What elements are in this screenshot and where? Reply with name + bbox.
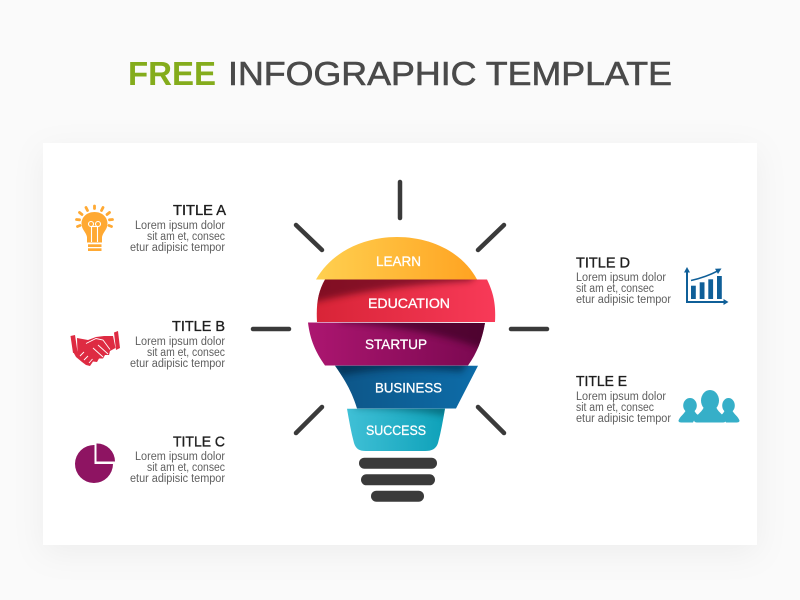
band: startup: STARTUP	[365, 337, 427, 352]
body text: etur adipisic tempor	[130, 358, 225, 370]
icon: handshake	[70, 331, 120, 366]
title: FREE	[128, 55, 216, 92]
band: education	[316, 280, 496, 322]
bulb base	[359, 458, 437, 502]
icon: group of people	[678, 390, 740, 422]
band: education: EDUCATION	[368, 296, 450, 311]
body text: Lorem ipsum dolor	[135, 451, 225, 463]
heading: TITLE B	[172, 319, 225, 335]
body text: Lorem ipsum dolor	[135, 336, 225, 348]
chart: light bulb of stacked bands	[308, 237, 495, 502]
body text	[130, 451, 225, 485]
heading: TITLE D	[576, 256, 630, 272]
icon: bar chart	[684, 267, 728, 305]
band: business	[335, 366, 478, 408]
body text	[130, 220, 225, 254]
body text	[576, 272, 671, 306]
body text: Lorem ipsum dolor	[576, 391, 666, 403]
body text	[130, 336, 225, 370]
body text: sit am et, consec	[147, 462, 225, 474]
icon: pie chart	[75, 443, 115, 483]
block: title D	[576, 256, 728, 306]
block: title E	[576, 374, 740, 425]
panel: white card	[43, 143, 757, 545]
body text: sit am et, consec	[147, 347, 225, 359]
body text: etur adipisic tempor	[576, 413, 671, 425]
title: INFOGRAPHIC TEMPLATE	[228, 55, 672, 92]
body text: sit am et, consec	[147, 231, 225, 243]
heading: TITLE A	[173, 203, 226, 219]
icon: light rays	[253, 182, 547, 433]
body text: sit am et, consec	[576, 402, 654, 414]
body text: etur adipisic tempor	[576, 294, 671, 306]
body text: etur adipisic tempor	[130, 473, 225, 485]
band: business: BUSINESS	[375, 380, 442, 396]
body text	[576, 391, 671, 425]
band: success: SUCCESS	[366, 423, 426, 438]
block: title A	[76, 203, 226, 254]
body text: Lorem ipsum dolor	[576, 272, 666, 284]
body text: sit am et, consec	[576, 283, 654, 295]
band: success	[347, 408, 445, 451]
icon: lightbulb	[76, 206, 112, 251]
band: startup	[308, 322, 485, 366]
body text: Lorem ipsum dolor	[135, 220, 225, 232]
band: learn	[316, 237, 477, 280]
block: title B	[70, 319, 225, 370]
band: learn: LEARN	[376, 254, 421, 269]
heading: TITLE E	[576, 374, 627, 390]
block: title C	[75, 434, 225, 485]
heading: TITLE C	[173, 434, 225, 450]
body text: etur adipisic tempor	[130, 242, 225, 254]
